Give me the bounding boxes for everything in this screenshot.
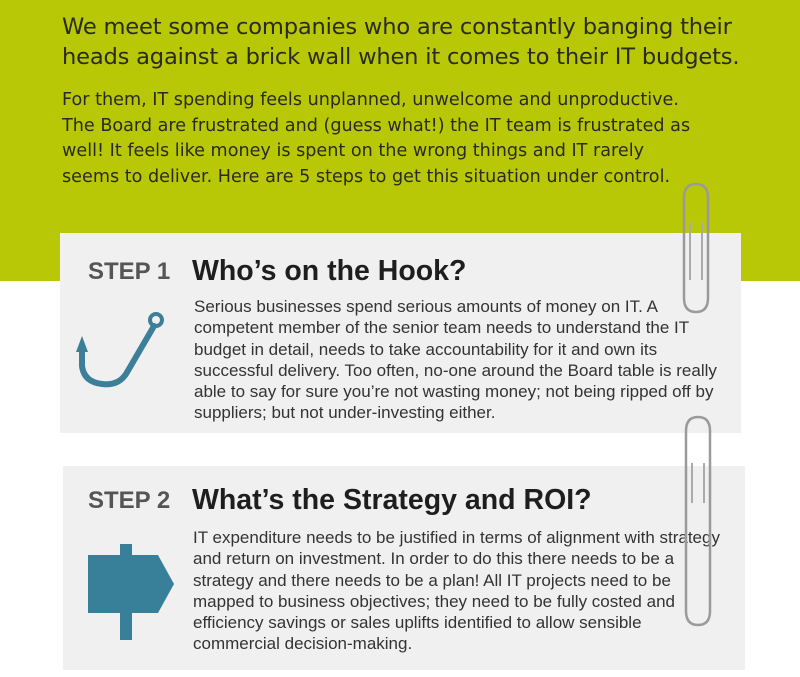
- green header band: [0, 0, 800, 281]
- step 2 title: What’s the Strategy and ROI?: [192, 484, 592, 516]
- step 1 text: able to say for sure you’re not wasting money; not being ripped off by: [194, 382, 713, 401]
- heading: We meet some companies who are constantly banging their: [62, 14, 732, 40]
- step 2 text: strategy and there needs to be a plan! All IT projects need to be: [193, 571, 671, 590]
- panel: step 1: [60, 233, 741, 433]
- icon: paperclip 1: [682, 182, 710, 314]
- step 2 text: IT expenditure needs to be justified in terms of alignment with strategy: [193, 528, 720, 547]
- step 1 text: budget in detail, needs to take accountability for it and own its: [194, 340, 657, 359]
- step 2 text: mapped to business objectives; they need to be fully costed and: [193, 592, 675, 611]
- icon: signpost: [88, 544, 174, 640]
- icon: hook: [76, 312, 164, 388]
- intro paragraph: For them, IT spending feels unplanned, unwelcome and unproductive.: [62, 90, 679, 110]
- icon: paperclip 2: [684, 416, 712, 626]
- step 1 text: Serious businesses spend serious amounts of money on IT. A: [194, 297, 658, 316]
- step 2 text: commercial decision-making.: [193, 634, 412, 653]
- panel: step 2: [63, 466, 745, 670]
- step 1 text: competent member of the senior team needs to understand the IT: [194, 318, 689, 337]
- step 2 text: [193, 528, 720, 653]
- intro paragraph: well! It feels like money is spent on the wrong things and IT rarely: [62, 141, 644, 161]
- step 2 text: efficiency savings or sales uplifts identified to allow sensible: [193, 613, 642, 632]
- intro paragraph: The Board are frustrated and (guess what!) the IT team is frustrated as: [62, 116, 690, 136]
- step 1 text: suppliers; but not under-investing either.: [194, 403, 495, 422]
- intro paragraph: [62, 90, 690, 186]
- step 1 label: STEP 1: [88, 258, 170, 285]
- heading: [62, 14, 739, 70]
- step 2 label: STEP 2: [88, 487, 170, 514]
- intro paragraph: seems to deliver. Here are 5 steps to get this situation under control.: [62, 166, 670, 186]
- step 1 title: Who’s on the Hook?: [192, 255, 466, 287]
- heading: heads against a brick wall when it comes to their IT budgets.: [62, 44, 739, 70]
- step 2 text: and return on investment. In order to do this there needs to be a: [193, 549, 674, 568]
- step 1 text: [194, 297, 717, 422]
- step 1 text: successful delivery. Too often, no-one around the Board table is really: [194, 361, 717, 380]
